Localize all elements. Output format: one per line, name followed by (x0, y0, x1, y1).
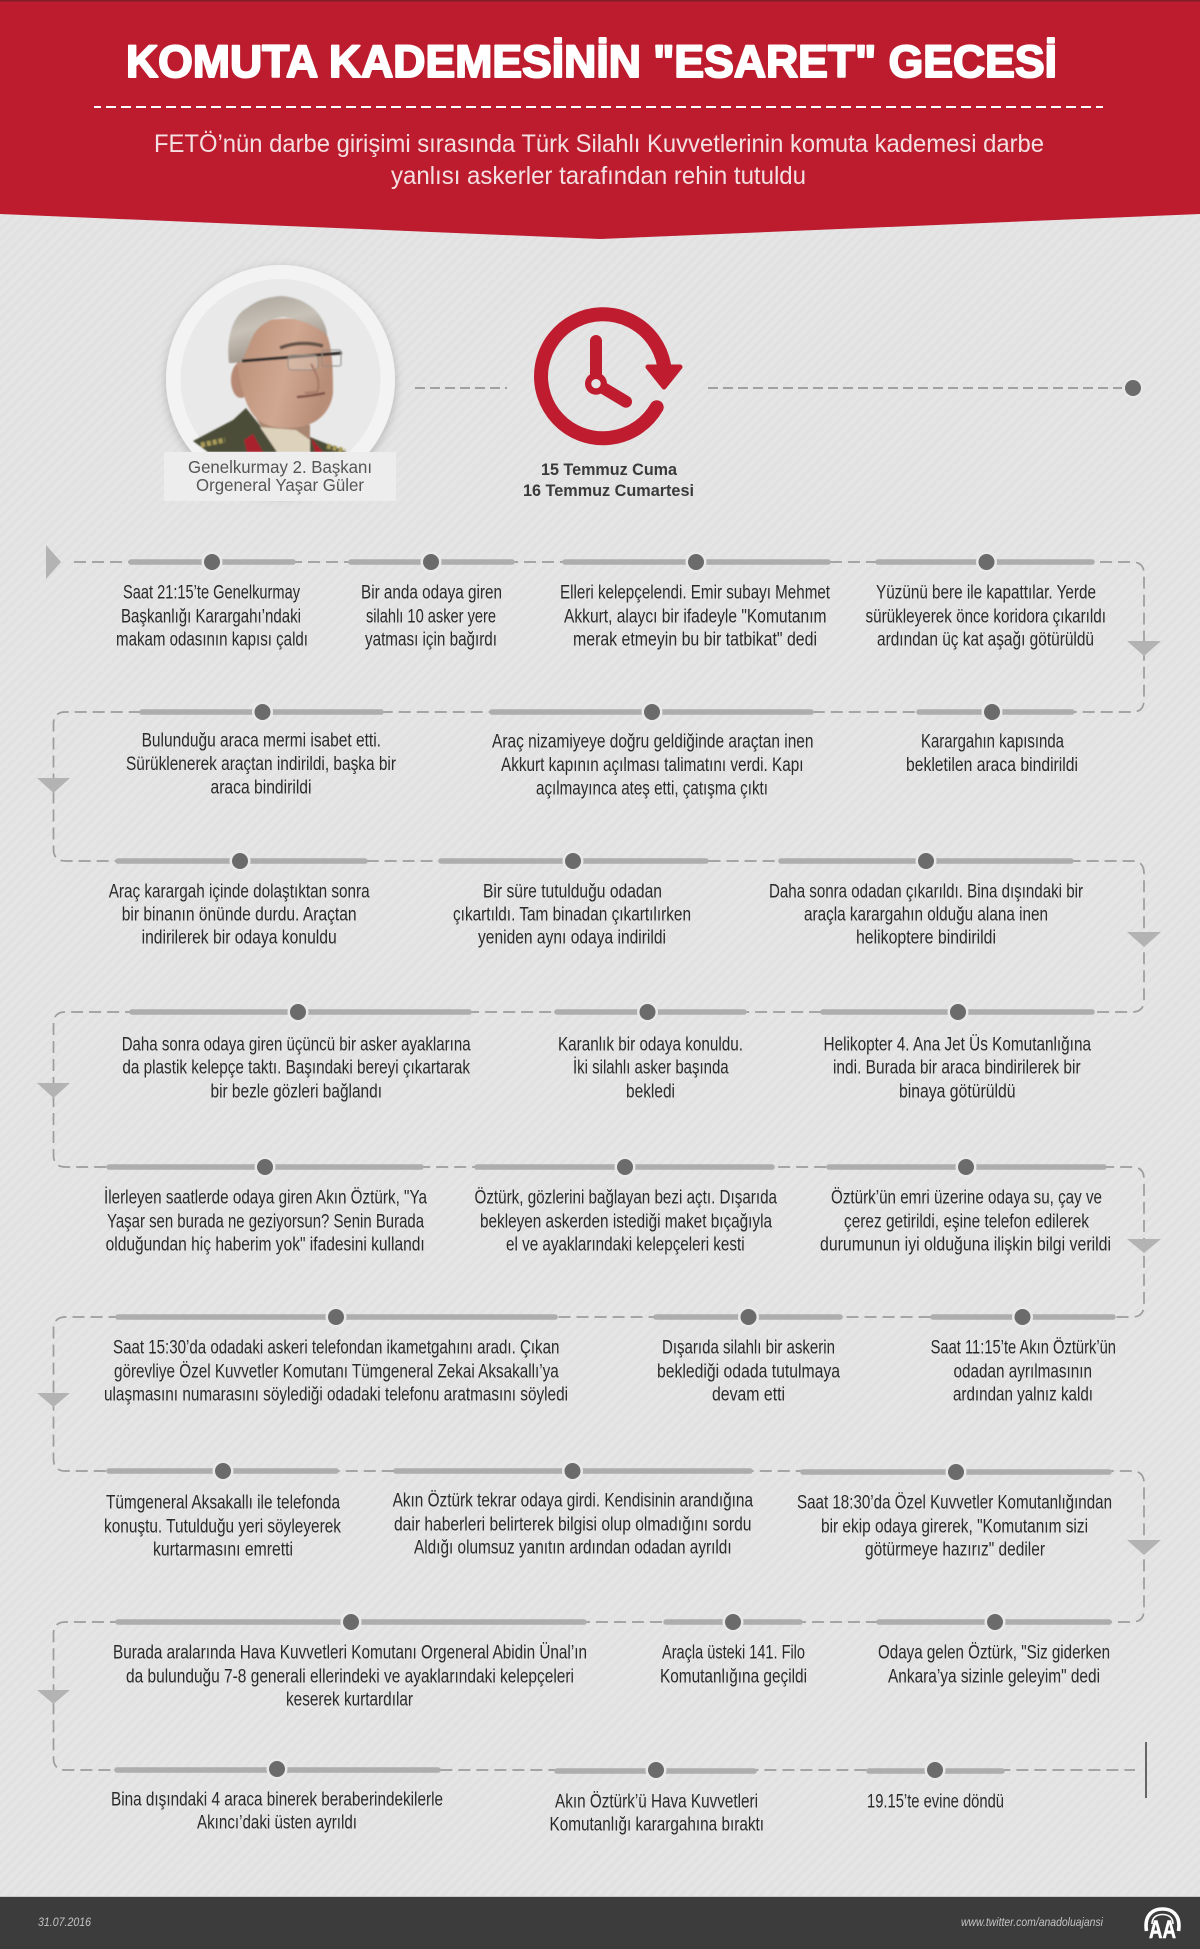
step 23: da bulunduğu 7-8 generali ellerindeki ve ayaklarındaki kelepçeleri (126, 1667, 574, 1688)
step 20 (104, 1460, 341, 1561)
step 16 (820, 1156, 1111, 1256)
portrait caption (188, 457, 372, 495)
step 27: Akın Öztürk’ü Hava Kuvvetleri (555, 1792, 758, 1813)
step 12: Karanlık bir odaya konuldu. (558, 1035, 743, 1056)
step 22: götürmeye hazırız" dediler (865, 1540, 1046, 1561)
step 3: Elleri kelepçelendi. Emir subayı Mehmet (560, 583, 831, 604)
step 22 (797, 1462, 1112, 1561)
step 21 (393, 1460, 753, 1559)
step 25: Odaya gelen Öztürk, "Siz giderken (878, 1643, 1110, 1664)
step 4 (866, 552, 1106, 651)
step 26 (111, 1758, 443, 1834)
dashed connector left of clock (415, 387, 507, 389)
step 26: Bina dışındaki 4 araca binerek beraberindekilerle (111, 1790, 443, 1811)
step 12: İki silahlı asker başında (573, 1058, 729, 1079)
step 10: Daha sonra odadan çıkarıldı. Bina dışındaki bir (769, 882, 1084, 903)
step 19: odadan ayrılmasının (954, 1362, 1092, 1383)
timeline row 2 (126, 702, 1078, 800)
step 3 (560, 552, 831, 651)
footer url: www.twitter.com/anadoluajansi (961, 1915, 1103, 1929)
step 18: devam etti (712, 1385, 785, 1406)
timeline row 6 (104, 1306, 1116, 1406)
step 2: Bir anda odaya giren (361, 583, 502, 604)
step 8: Araç karargah içinde dolaştıktan sonra (109, 882, 370, 903)
step 15: bekleyen askerden istediği maket bıçağıyla (480, 1212, 772, 1233)
step 14: olduğundan hiç haberim yok" ifadesini kullandı (106, 1235, 425, 1256)
step 6: Araç nizamiyeye doğru geldiğinde araçtan inen (492, 732, 814, 753)
step 22: bir ekip odaya girerek, "Komutanım sizi (821, 1517, 1088, 1538)
step 3: merak etmeyin bu bir tatbikat" dedi (573, 630, 817, 651)
step 12: bekledi (626, 1082, 675, 1103)
step 20: kurtarmasını emretti (153, 1540, 293, 1561)
dates: 15 Temmuz Cuma (541, 460, 678, 479)
connector end dot (1123, 378, 1143, 398)
step 11: bir bezle gözleri bağlandı (210, 1082, 382, 1103)
dates: 16 Temmuz Cumartesi (523, 481, 694, 500)
step 17 (104, 1306, 568, 1406)
subtitle: yanlısı askerler tarafından rehin tutuldu (391, 162, 806, 190)
step 11: Daha sonra odaya giren üçüncü bir asker ayaklarına (122, 1035, 471, 1056)
step 17: Saat 15:30’da odadaki askeri telefondan ikametgahını aradı. Çıkan (113, 1338, 559, 1359)
step 27 (550, 1760, 764, 1836)
step 1: Başkanlığı Karargahı’ndaki (121, 607, 301, 628)
timeline row 7 (104, 1460, 1112, 1561)
step 21: Aldığı olumsuz yanıtın ardından odadan ayrıldı (414, 1538, 732, 1559)
step 21: Akın Öztürk tekrar odaya girdi. Kendisinin arandığına (393, 1491, 753, 1512)
step 13: binaya götürüldü (899, 1082, 1016, 1103)
step 5: Bulunduğu araca mermi isabet etti. (142, 731, 381, 752)
step 8 (109, 850, 370, 949)
step 19: ardından yalnız kaldı (953, 1385, 1093, 1406)
step 14 (104, 1156, 427, 1256)
step 22: Saat 18:30’da Özel Kuvvetler Komutanlığından (797, 1493, 1112, 1514)
step 6: açılmayınca ateş etti, çatışma çıktı (536, 779, 768, 800)
step 1: makam odasının kapısı çaldı (116, 630, 308, 651)
dates (523, 460, 694, 500)
step 7 (906, 702, 1078, 776)
step 19: Saat 11:15’te Akın Öztürk’ün (931, 1338, 1116, 1359)
step 18: beklediği odada tutulmaya (657, 1362, 840, 1383)
timeline row 8 (113, 1612, 1110, 1711)
step 17: görevliye Özel Kuvvetler Komutanı Tümgeneral Zekai Aksakallı’ya (114, 1362, 559, 1383)
portrait caption: Genelkurmay 2. Başkanı (188, 457, 372, 477)
step 6 (492, 702, 814, 800)
step 23: keserek kurtardılar (286, 1690, 414, 1711)
icon: AA logo: AA (1149, 1916, 1176, 1944)
step 7: Karargahın kapısında (921, 732, 1064, 753)
step 2: silahlı 10 asker yere (366, 607, 496, 628)
step 10 (769, 850, 1084, 949)
step 25: Ankara’ya sizinle geleyim" dedi (888, 1667, 1100, 1688)
step 13: indi. Burada bir araca bindirilerek bir (833, 1058, 1081, 1079)
footer date: 31.07.2016 (38, 1915, 91, 1929)
step 8: indirilerek bir odaya konuldu (142, 928, 337, 949)
step 21: dair haberleri belirterek bilgisi olup olmadığını sordu (394, 1515, 752, 1536)
step 4: Yüzünü bere ile kapattılar. Yerde (876, 583, 1096, 604)
timeline arrows (37, 545, 1161, 1704)
step 10: araçla karargahın olduğu alana inen (804, 905, 1048, 926)
step 20: Tümgeneral Aksakallı ile telefonda (106, 1493, 340, 1514)
step 14: İlerleyen saatlerde odaya giren Akın Öztürk, "Ya (104, 1188, 427, 1209)
step 3: Akkurt, alaycı bir ifadeyle "Komutanım (564, 607, 826, 628)
step 2: yatması için bağırdı (365, 630, 497, 651)
step 23: Burada aralarında Hava Kuvvetleri Komutanı Orgeneral Abidin Ünal’ın (113, 1643, 587, 1664)
step 5: araca bindirildi (210, 778, 312, 799)
step 8: bir binanın önünde durdu. Araçtan (122, 905, 357, 926)
step 17: ulaşmasını numarasını söylediği odadaki telefonu aratmasını söyledi (104, 1385, 568, 1406)
step 14: Yaşar sen burada ne geziyorsun? Senin Burada (107, 1212, 424, 1233)
dashed connector right of clock (708, 387, 1122, 389)
timeline row 5 (104, 1156, 1111, 1256)
step 25 (878, 1612, 1110, 1688)
title: KOMUTA KADEMESİNİN "ESARET" GECESİ (126, 36, 1057, 87)
timeline end marker (1145, 1742, 1147, 1798)
timeline dashed path (54, 562, 1144, 1770)
step 19 (931, 1306, 1116, 1406)
subtitle: FETÖ’nün darbe girişimi sırasında Türk Silahlı Kuvvetlerinin komuta kademesi darbe (154, 130, 1044, 158)
step 11 (122, 1002, 471, 1103)
timeline row 9 (111, 1758, 1004, 1836)
step 24: Komutanlığına geçildi (660, 1667, 807, 1688)
step 20: konuştu. Tutulduğu yeri söyleyerek (104, 1517, 341, 1538)
step 4: ardından üç kat aşağı götürüldü (877, 630, 1094, 651)
subtitle (154, 130, 1044, 190)
timeline row 3 (109, 850, 1084, 949)
step 1 (116, 552, 308, 651)
step 28: 19.15’te evine döndü (867, 1792, 1004, 1813)
step 18: Dışarıda silahlı bir askerin (662, 1338, 835, 1359)
step 11: da plastik kelepçe taktı. Başındaki bereyi çıkartarak (122, 1058, 470, 1079)
step 10: helikoptere bindirildi (856, 928, 996, 949)
timeline row 4 (122, 1002, 1092, 1103)
step 18 (656, 1306, 840, 1406)
step 9 (441, 850, 706, 949)
step 1: Saat 21:15’te Genelkurmay (123, 583, 300, 604)
step 13 (823, 1002, 1092, 1103)
step 6: Akkurt kapının açılması talimatını verdi. Kapı (501, 755, 804, 776)
step 24 (660, 1612, 807, 1688)
step 7: bekletilen araca bindirildi (906, 755, 1078, 776)
step 28 (867, 1760, 1004, 1813)
step 15 (474, 1156, 777, 1256)
step 12 (557, 1002, 744, 1103)
step 5: Sürüklenerek araçtan indirildi, başka bir (126, 754, 397, 775)
portrait of Yaşar Güler (164, 265, 396, 501)
step 4: sürükleyerek önce koridora çıkarıldı (866, 607, 1106, 628)
step 13: Helikopter 4. Ana Jet Üs Komutanlığına (824, 1035, 1091, 1056)
icon: clock with arrow (541, 314, 680, 438)
portrait caption: Orgeneral Yaşar Güler (196, 475, 364, 495)
step 24: Araçla üsteki 141. Filo (662, 1643, 805, 1664)
step 27: Komutanlığı karargahına bıraktı (550, 1815, 764, 1836)
step 16: durumunun iyi olduğuna ilişkin bilgi verildi (820, 1235, 1111, 1256)
icon: AA logo (1146, 1909, 1179, 1944)
step 23 (113, 1612, 587, 1711)
step 15: Öztürk, gözlerini bağlayan bezi açtı. Dışarıda (474, 1188, 777, 1209)
step 9: yeniden aynı odaya indirildi (478, 928, 666, 949)
step 5 (126, 702, 397, 799)
step 16: çerez getirildi, eşine telefon edilerek (844, 1212, 1089, 1233)
header banner (0, 0, 1200, 239)
step 9: çıkartıldı. Tam binadan çıkartılırken (453, 905, 691, 926)
timeline row 1 (116, 552, 1106, 651)
step 15: el ve ayaklarındaki kelepçeleri kesti (506, 1235, 745, 1256)
step 2 (351, 552, 512, 651)
step 16: Öztürk’ün emri üzerine odaya su, çay ve (831, 1188, 1102, 1209)
step 26: Akıncı’daki üsten ayrıldı (197, 1813, 357, 1834)
step 9: Bir süre tutulduğu odadan (483, 882, 662, 903)
footer bar (0, 1896, 1200, 1949)
